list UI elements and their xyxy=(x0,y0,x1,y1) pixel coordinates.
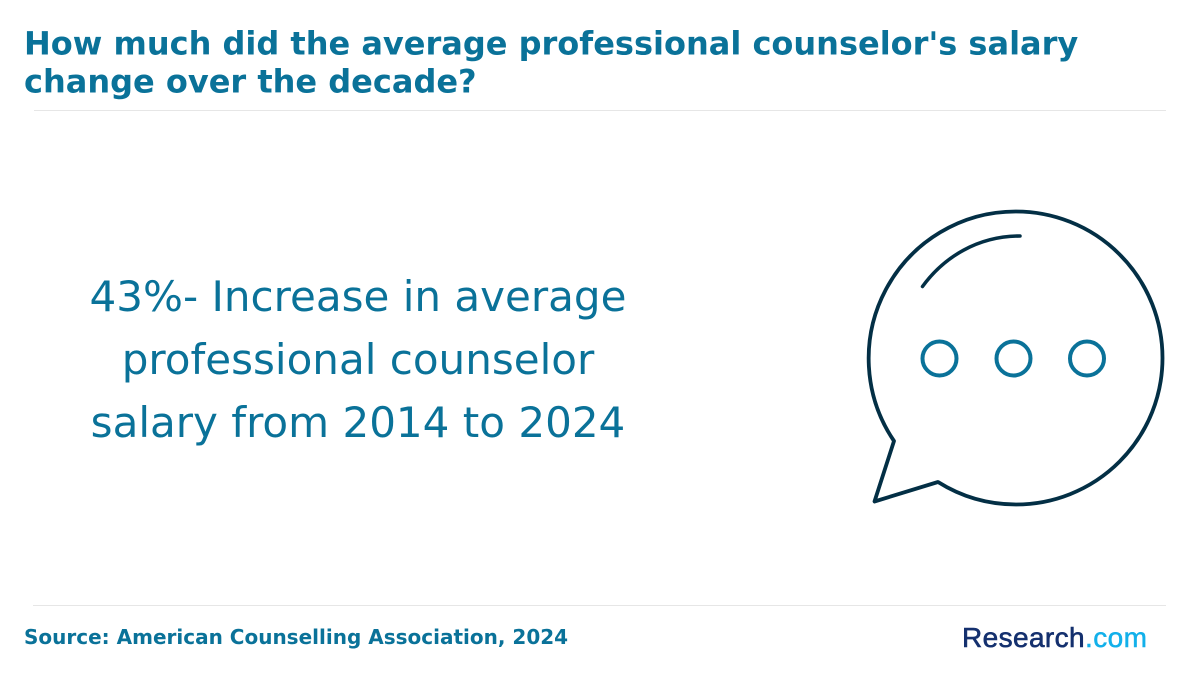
main statistic text: salary from 2014 to 2024 xyxy=(91,398,625,446)
title: How much did the average professional counselor's salary xyxy=(24,24,1078,62)
speech bubble outline xyxy=(869,211,1162,504)
logo: Research.com: Research.com xyxy=(962,622,1147,652)
bubble highlight arc xyxy=(922,236,1020,286)
main statistic text: 43%- Increase in average xyxy=(90,272,626,320)
source note: Source: American Counselling Association, 2024 xyxy=(24,625,568,649)
ellipsis dots xyxy=(922,342,1104,376)
main statistic text: professional counselor xyxy=(122,334,594,384)
title: change over the decade? xyxy=(24,62,477,100)
main statistic text xyxy=(90,272,626,446)
title xyxy=(24,24,1078,100)
